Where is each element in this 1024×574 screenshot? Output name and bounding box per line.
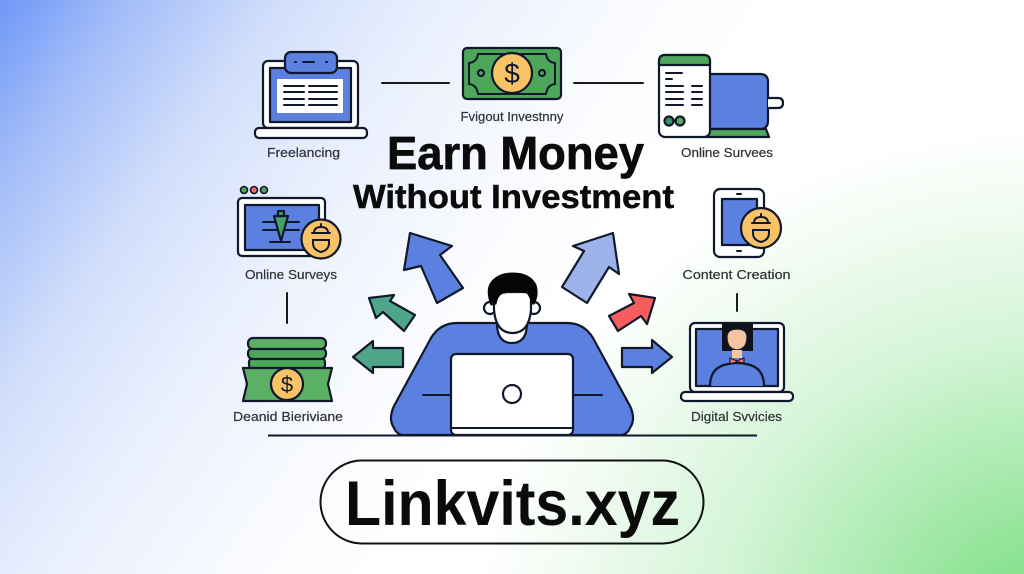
label: Fvigout Investnny: Fvigout Investnny xyxy=(460,110,564,124)
arrow: green left xyxy=(353,341,403,373)
label: Deanid Bieriviane: Deanid Bieriviane xyxy=(233,410,343,424)
label: Digital Svvicies: Digital Svvicies xyxy=(691,410,782,424)
arrow: green up-left xyxy=(369,295,415,331)
site name pill: Linkvits.xyz xyxy=(345,469,680,539)
icon: freelancing laptop xyxy=(255,52,367,138)
arrow: red up-right xyxy=(609,294,655,331)
arrow: light blue up-right xyxy=(562,233,619,303)
icon: banknote xyxy=(463,48,561,99)
icon: banknote: $ xyxy=(504,58,520,89)
icon: cash stack: $ xyxy=(281,372,293,397)
title: Earn Money xyxy=(387,127,644,179)
person at laptop xyxy=(391,273,633,435)
arrow: blue right xyxy=(622,340,672,373)
icon: tablet with acorn badge xyxy=(714,189,781,257)
icon: laptop with presenter xyxy=(681,323,793,401)
connector: content creation to digital services xyxy=(736,294,738,311)
title xyxy=(353,127,674,215)
label: Online Survees: Online Survees xyxy=(681,146,773,160)
label: Online Surveys: Online Surveys xyxy=(245,268,337,282)
label: Content Creation: Content Creation xyxy=(682,268,791,282)
arrow: blue up-left xyxy=(404,233,463,303)
icon: browser with acorn badge xyxy=(238,186,340,258)
title: Without Investment xyxy=(353,178,674,215)
icon: cash stack xyxy=(243,338,332,401)
connector: cash to surveys xyxy=(574,82,643,84)
label: Freelancing: Freelancing xyxy=(267,146,340,160)
ground line xyxy=(268,434,757,436)
connector: freelancing to cash xyxy=(382,82,449,84)
connector: surveys to cash stack xyxy=(286,293,288,323)
icon: survey document and device xyxy=(659,55,783,137)
